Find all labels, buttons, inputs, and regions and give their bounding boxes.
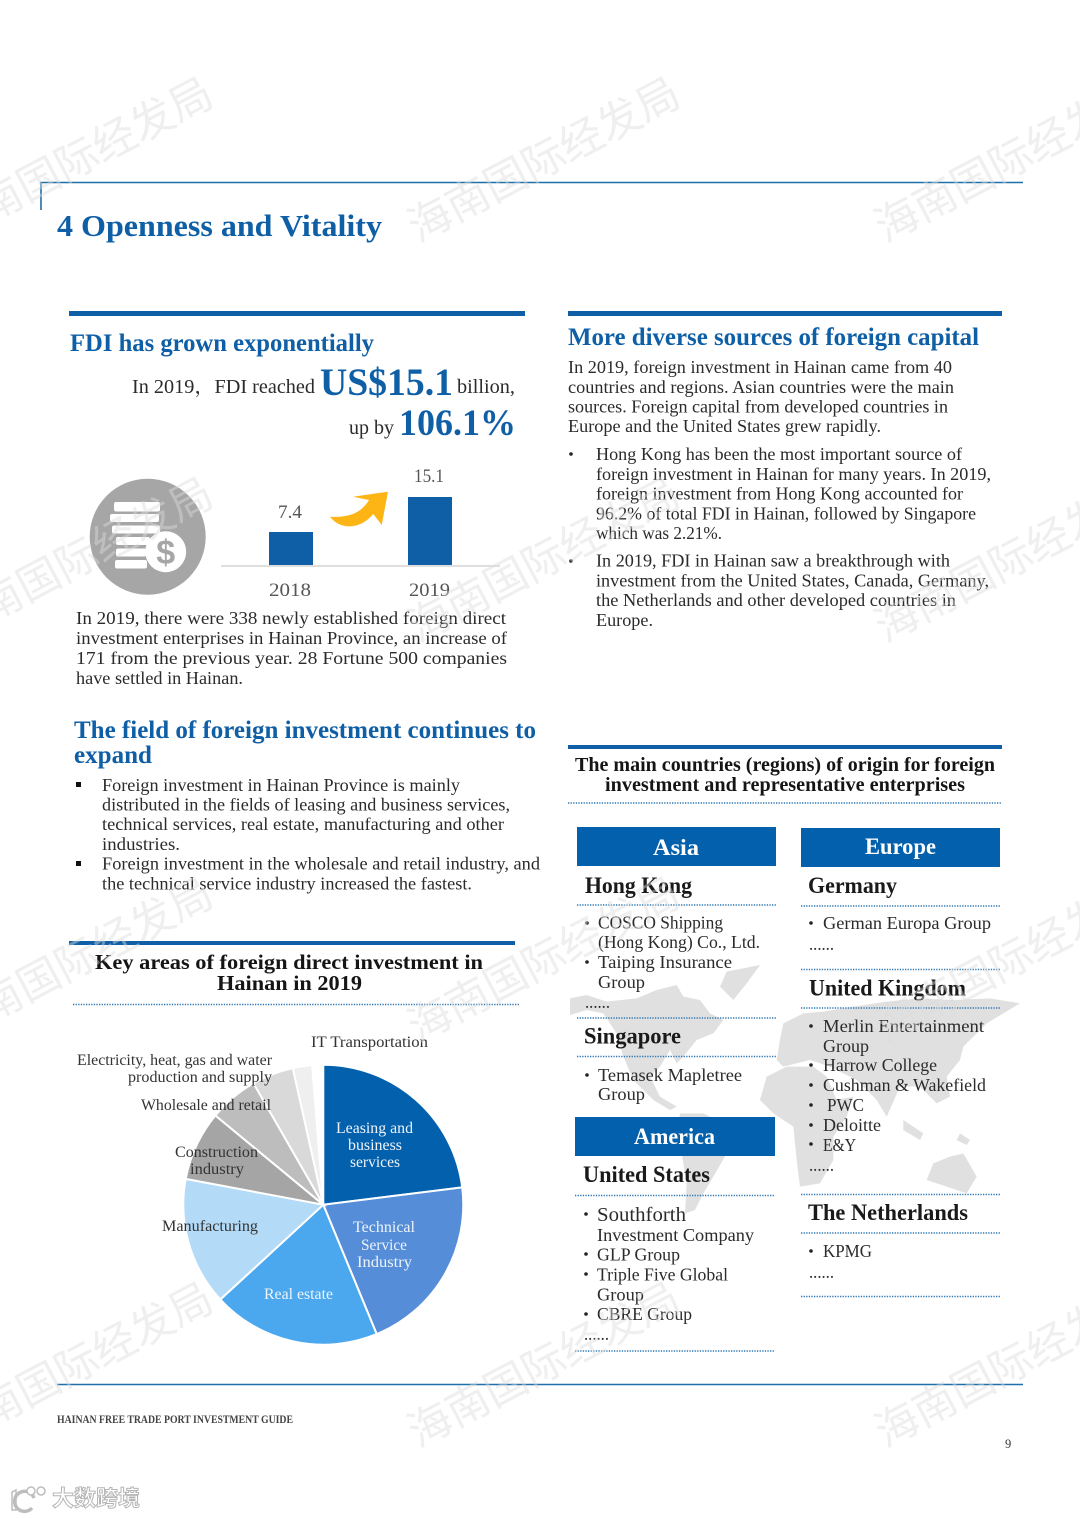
country: United States: Group xyxy=(597,1284,644,1304)
callout: FDI reached: billion, xyxy=(457,376,515,398)
country: United Kingdom: Harrow College xyxy=(823,1055,937,1075)
text block: FDI enterprises: 171 from the previous year. 28 Fortune 500 companies xyxy=(76,648,507,668)
bullet list: sources: investment from the United States, Canada, Germany, xyxy=(596,570,989,590)
icon: coins with dollar sign: $ xyxy=(156,534,175,572)
country: Hong Kong: (Hong Kong) Co., Ltd. xyxy=(598,932,760,952)
bar chart: FDI 2018 vs 2019: 2018 xyxy=(269,580,311,601)
heading: More diverse sources: More diverse sources of foreign capital xyxy=(568,324,979,351)
arrow: growth xyxy=(330,492,388,526)
country: Germany: German Europa Group xyxy=(823,913,991,933)
header: America: America xyxy=(634,1124,715,1149)
logo: 大数跨境 watermark xyxy=(12,1481,140,1513)
header: America xyxy=(575,1117,775,1156)
country: Hong Kong: Group xyxy=(598,972,645,992)
bullet list: fields: industries. xyxy=(102,834,180,854)
footer text: HAINAN FREE TRADE PORT INVESTMENT GUIDE xyxy=(57,1414,293,1426)
bar chart: FDI 2018 vs 2019 xyxy=(221,466,500,601)
bullet list: sources: the Netherlands and other developed countries in xyxy=(596,590,956,610)
country: United Kingdom: PWC xyxy=(827,1095,864,1115)
header: Europe: Europe xyxy=(865,834,936,859)
callout: FDI reached xyxy=(132,361,516,444)
bullet list: fields xyxy=(76,775,540,894)
watermarks: 海南国际经发局 xyxy=(395,1265,689,1459)
panel: origin countries and enterprises xyxy=(568,745,1002,1351)
watermarks: 海南国际经发局 xyxy=(395,460,689,654)
country: United Kingdom: United Kingdom xyxy=(809,976,966,1000)
icon: coins with dollar sign xyxy=(90,479,206,595)
title: 4 Openness and Vitality xyxy=(57,208,383,243)
panel: field of foreign investment xyxy=(74,717,540,894)
pie labels: Electricity, heat, gas and water xyxy=(77,1052,273,1069)
heading: key areas: Hainan in 2019 xyxy=(217,971,362,995)
country: United States xyxy=(575,1162,775,1351)
country: The Netherlands: The Netherlands xyxy=(808,1200,968,1225)
text block: FDI enterprises: investment enterprises in Hainan Province, an increase of xyxy=(76,628,507,648)
country: Singapore xyxy=(577,1024,776,1124)
pie labels: Manufacturing xyxy=(162,1218,258,1235)
heading: field of foreign investment: expand xyxy=(74,742,152,769)
pie labels: Industry xyxy=(357,1254,412,1271)
column: Asia xyxy=(575,827,776,1351)
country: United States: CBRE Group xyxy=(597,1304,692,1324)
country: United States: GLP Group xyxy=(597,1244,680,1264)
watermarks: 海南国际经发局 xyxy=(395,860,689,1054)
pie labels: Service xyxy=(361,1237,407,1254)
bullet list: fields: technical services, real estate, manufacturing and other xyxy=(102,814,504,834)
country: The Netherlands: KPMG xyxy=(823,1241,872,1261)
bar chart: FDI 2018 vs 2019: 2019 xyxy=(409,580,450,601)
text block: FDI enterprises xyxy=(76,608,507,688)
country: Singapore: ...... xyxy=(585,1104,610,1124)
pie labels: business xyxy=(348,1137,402,1154)
panel: FDI growth xyxy=(69,311,525,688)
bullet list: sources: foreign investment from Hong Kong accounted for xyxy=(596,484,963,504)
country: Singapore: Temasek Mapletree xyxy=(598,1065,742,1085)
text block: intro: sources. Foreign capital from developed countries in xyxy=(568,396,948,416)
bullet list: sources: which was 2.21%. xyxy=(596,523,722,543)
heading: field of foreign investment: The field of foreign investment continues to xyxy=(74,717,536,744)
heading: main countries: The main countries (regions) of origin for foreign xyxy=(575,754,995,776)
country: United States: Triple Five Global xyxy=(597,1264,728,1284)
country: The Netherlands xyxy=(801,1200,1000,1296)
pie labels: services xyxy=(350,1154,400,1171)
text block: intro xyxy=(568,357,954,436)
pie chart xyxy=(183,1065,463,1345)
column: Europe xyxy=(801,828,1000,1296)
panel: key areas pie chart xyxy=(69,941,519,1345)
text block: intro: countries and regions. Asian countries were the main xyxy=(568,377,954,397)
pie labels: production and supply xyxy=(128,1069,272,1086)
panel: diverse sources of capital xyxy=(568,311,1002,630)
header: Europe xyxy=(801,828,1000,867)
heading: field of foreign investment xyxy=(74,717,536,769)
country: United Kingdom: Merlin Entertainment xyxy=(823,1016,984,1036)
bullet list: fields: Foreign investment in Hainan Province is mainly xyxy=(102,775,460,795)
bullet list: sources: foreign investment in Hainan for many years. In 2019, xyxy=(596,464,991,484)
header: Asia xyxy=(577,827,776,866)
callout: FDI reached: US$15.1 xyxy=(320,361,453,404)
text block: intro: Europe and the United States grew rapidly. xyxy=(568,416,881,436)
bullet list: sources: Europe. xyxy=(596,610,653,630)
pie labels: industry xyxy=(190,1161,244,1178)
country: Hong Kong: COSCO Shipping xyxy=(598,912,723,932)
country: United States: United States xyxy=(583,1162,710,1187)
heading: main countries xyxy=(575,754,995,796)
watermarks: 海南国际经发局 xyxy=(395,60,689,254)
bullet list: sources xyxy=(569,444,991,630)
text block: intro: In 2019, foreign investment in Hainan came from 40 xyxy=(568,357,952,377)
bar chart: FDI 2018 vs 2019: 15.1 xyxy=(414,466,444,487)
bullet list: sources: In 2019, FDI in Hainan saw a breakthrough with xyxy=(596,550,950,570)
header: Asia: Asia xyxy=(653,835,700,860)
logo: 大数跨境 watermark: 大数跨境 xyxy=(52,1481,140,1513)
page number: 9 xyxy=(1005,1437,1011,1451)
country: Germany: ...... xyxy=(809,934,834,954)
country: Hong Kong: Hong Kong xyxy=(585,873,692,898)
text block: FDI enterprises: have settled in Hainan. xyxy=(76,668,243,688)
bullet list: sources: 96.2% of total FDI in Hainan, followed by Singapore xyxy=(596,504,976,524)
country: United Kingdom: E&Y xyxy=(823,1135,856,1155)
country: United Kingdom: Cushman & Wakefield xyxy=(823,1075,986,1095)
country: United Kingdom: Group xyxy=(823,1036,869,1056)
country: Germany xyxy=(801,873,1000,970)
header rule xyxy=(41,182,1023,210)
country: The Netherlands: ...... xyxy=(809,1262,834,1282)
country: United States: Investment Company xyxy=(597,1225,754,1245)
country: Germany: Germany xyxy=(808,873,897,898)
bullet list: fields: the technical service industry increased the fastest. xyxy=(102,874,472,894)
pie labels: IT Transportation xyxy=(311,1034,428,1051)
pie labels: Leasing and xyxy=(336,1120,413,1137)
country: United Kingdom: Deloitte xyxy=(823,1115,881,1135)
pie labels: Wholesale and retail xyxy=(141,1097,271,1114)
pie labels: Real estate xyxy=(264,1286,333,1303)
heading: key areas: Key areas of foreign direct investment in xyxy=(95,950,483,974)
country: United Kingdom xyxy=(801,976,1000,1194)
pie labels xyxy=(77,1034,428,1303)
text block: FDI enterprises: In 2019, there were 338 newly established foreign direct xyxy=(76,608,506,628)
pie labels: Technical xyxy=(353,1219,415,1236)
bullet list: fields: Foreign investment in the wholesale and retail industry, and xyxy=(102,854,540,874)
country: United States: Southforth xyxy=(597,1204,686,1226)
heading: main countries: investment and representative enterprises xyxy=(605,774,965,796)
heading: key areas xyxy=(95,950,483,995)
callout: FDI reached: 106.1% xyxy=(399,403,516,444)
country: United States: ...... xyxy=(584,1324,609,1344)
bullet list: sources: Hong Kong has been the most important source of xyxy=(596,444,962,464)
bullet list: fields: distributed in the fields of leasing and business services, xyxy=(102,794,510,814)
world map background xyxy=(570,965,1020,1213)
pie labels: Construction xyxy=(175,1144,258,1161)
country: Hong Kong xyxy=(577,873,776,1018)
country: Singapore: Singapore xyxy=(584,1024,681,1048)
country: United Kingdom: ...... xyxy=(809,1155,834,1175)
country: Singapore: Group xyxy=(598,1084,645,1104)
country: Hong Kong: Taiping Insurance xyxy=(598,952,732,972)
callout: FDI reached: In 2019，FDI reached xyxy=(132,376,315,398)
heading: FDI has grown exponentially: FDI has grown exponentially xyxy=(70,330,374,357)
callout: FDI reached: up by xyxy=(349,417,394,439)
bar chart: FDI 2018 vs 2019: 7.4 xyxy=(278,502,303,523)
country: Hong Kong: ...... xyxy=(585,992,610,1012)
